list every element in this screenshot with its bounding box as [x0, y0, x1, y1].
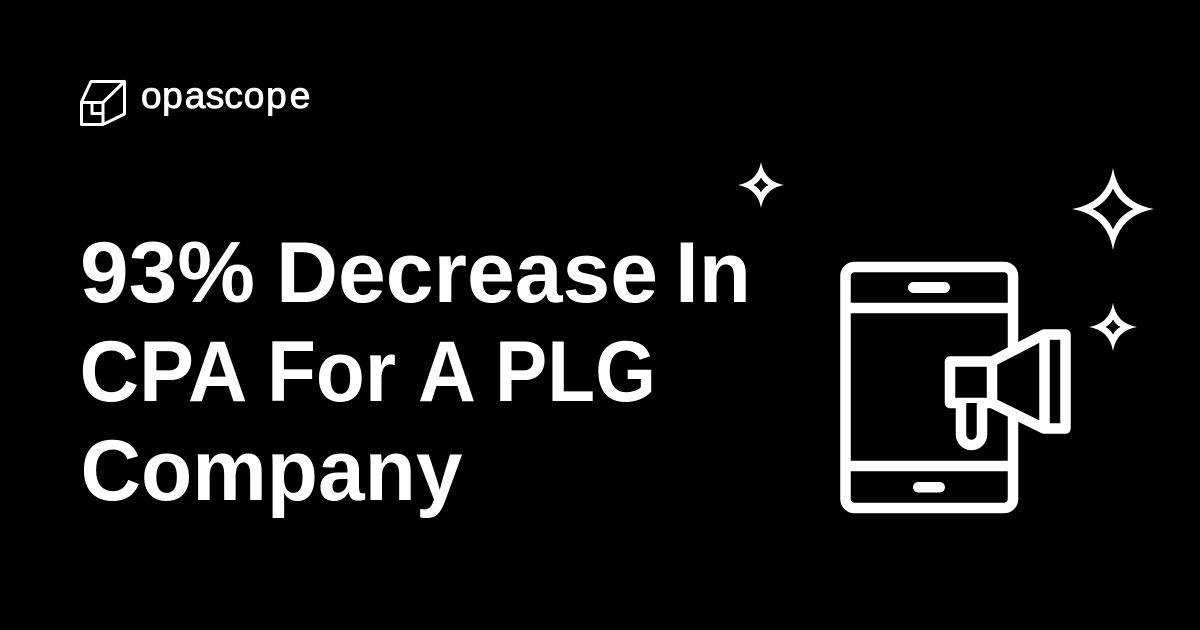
title [80, 225, 751, 519]
megaphone [950, 334, 1066, 445]
title: CPA [80, 324, 248, 420]
logo: opascope [82, 75, 310, 124]
phone speaker [908, 282, 950, 293]
title: In [675, 225, 751, 321]
icon: small sparkle left [738, 162, 784, 208]
title: Company [80, 423, 463, 519]
title: Decrease [276, 225, 658, 321]
icon: phone with megaphone [846, 267, 1066, 508]
phone home button [913, 482, 945, 492]
icon: large sparkle [1072, 168, 1154, 250]
phone body [846, 267, 1013, 508]
title: For [267, 324, 396, 420]
icon: opascope cube [82, 82, 124, 124]
icon: small sparkle right [1089, 303, 1137, 351]
logo wordmark: opascope [141, 75, 310, 116]
title: PLG [495, 324, 656, 420]
title: 93% [80, 225, 255, 321]
title: A [418, 324, 476, 420]
